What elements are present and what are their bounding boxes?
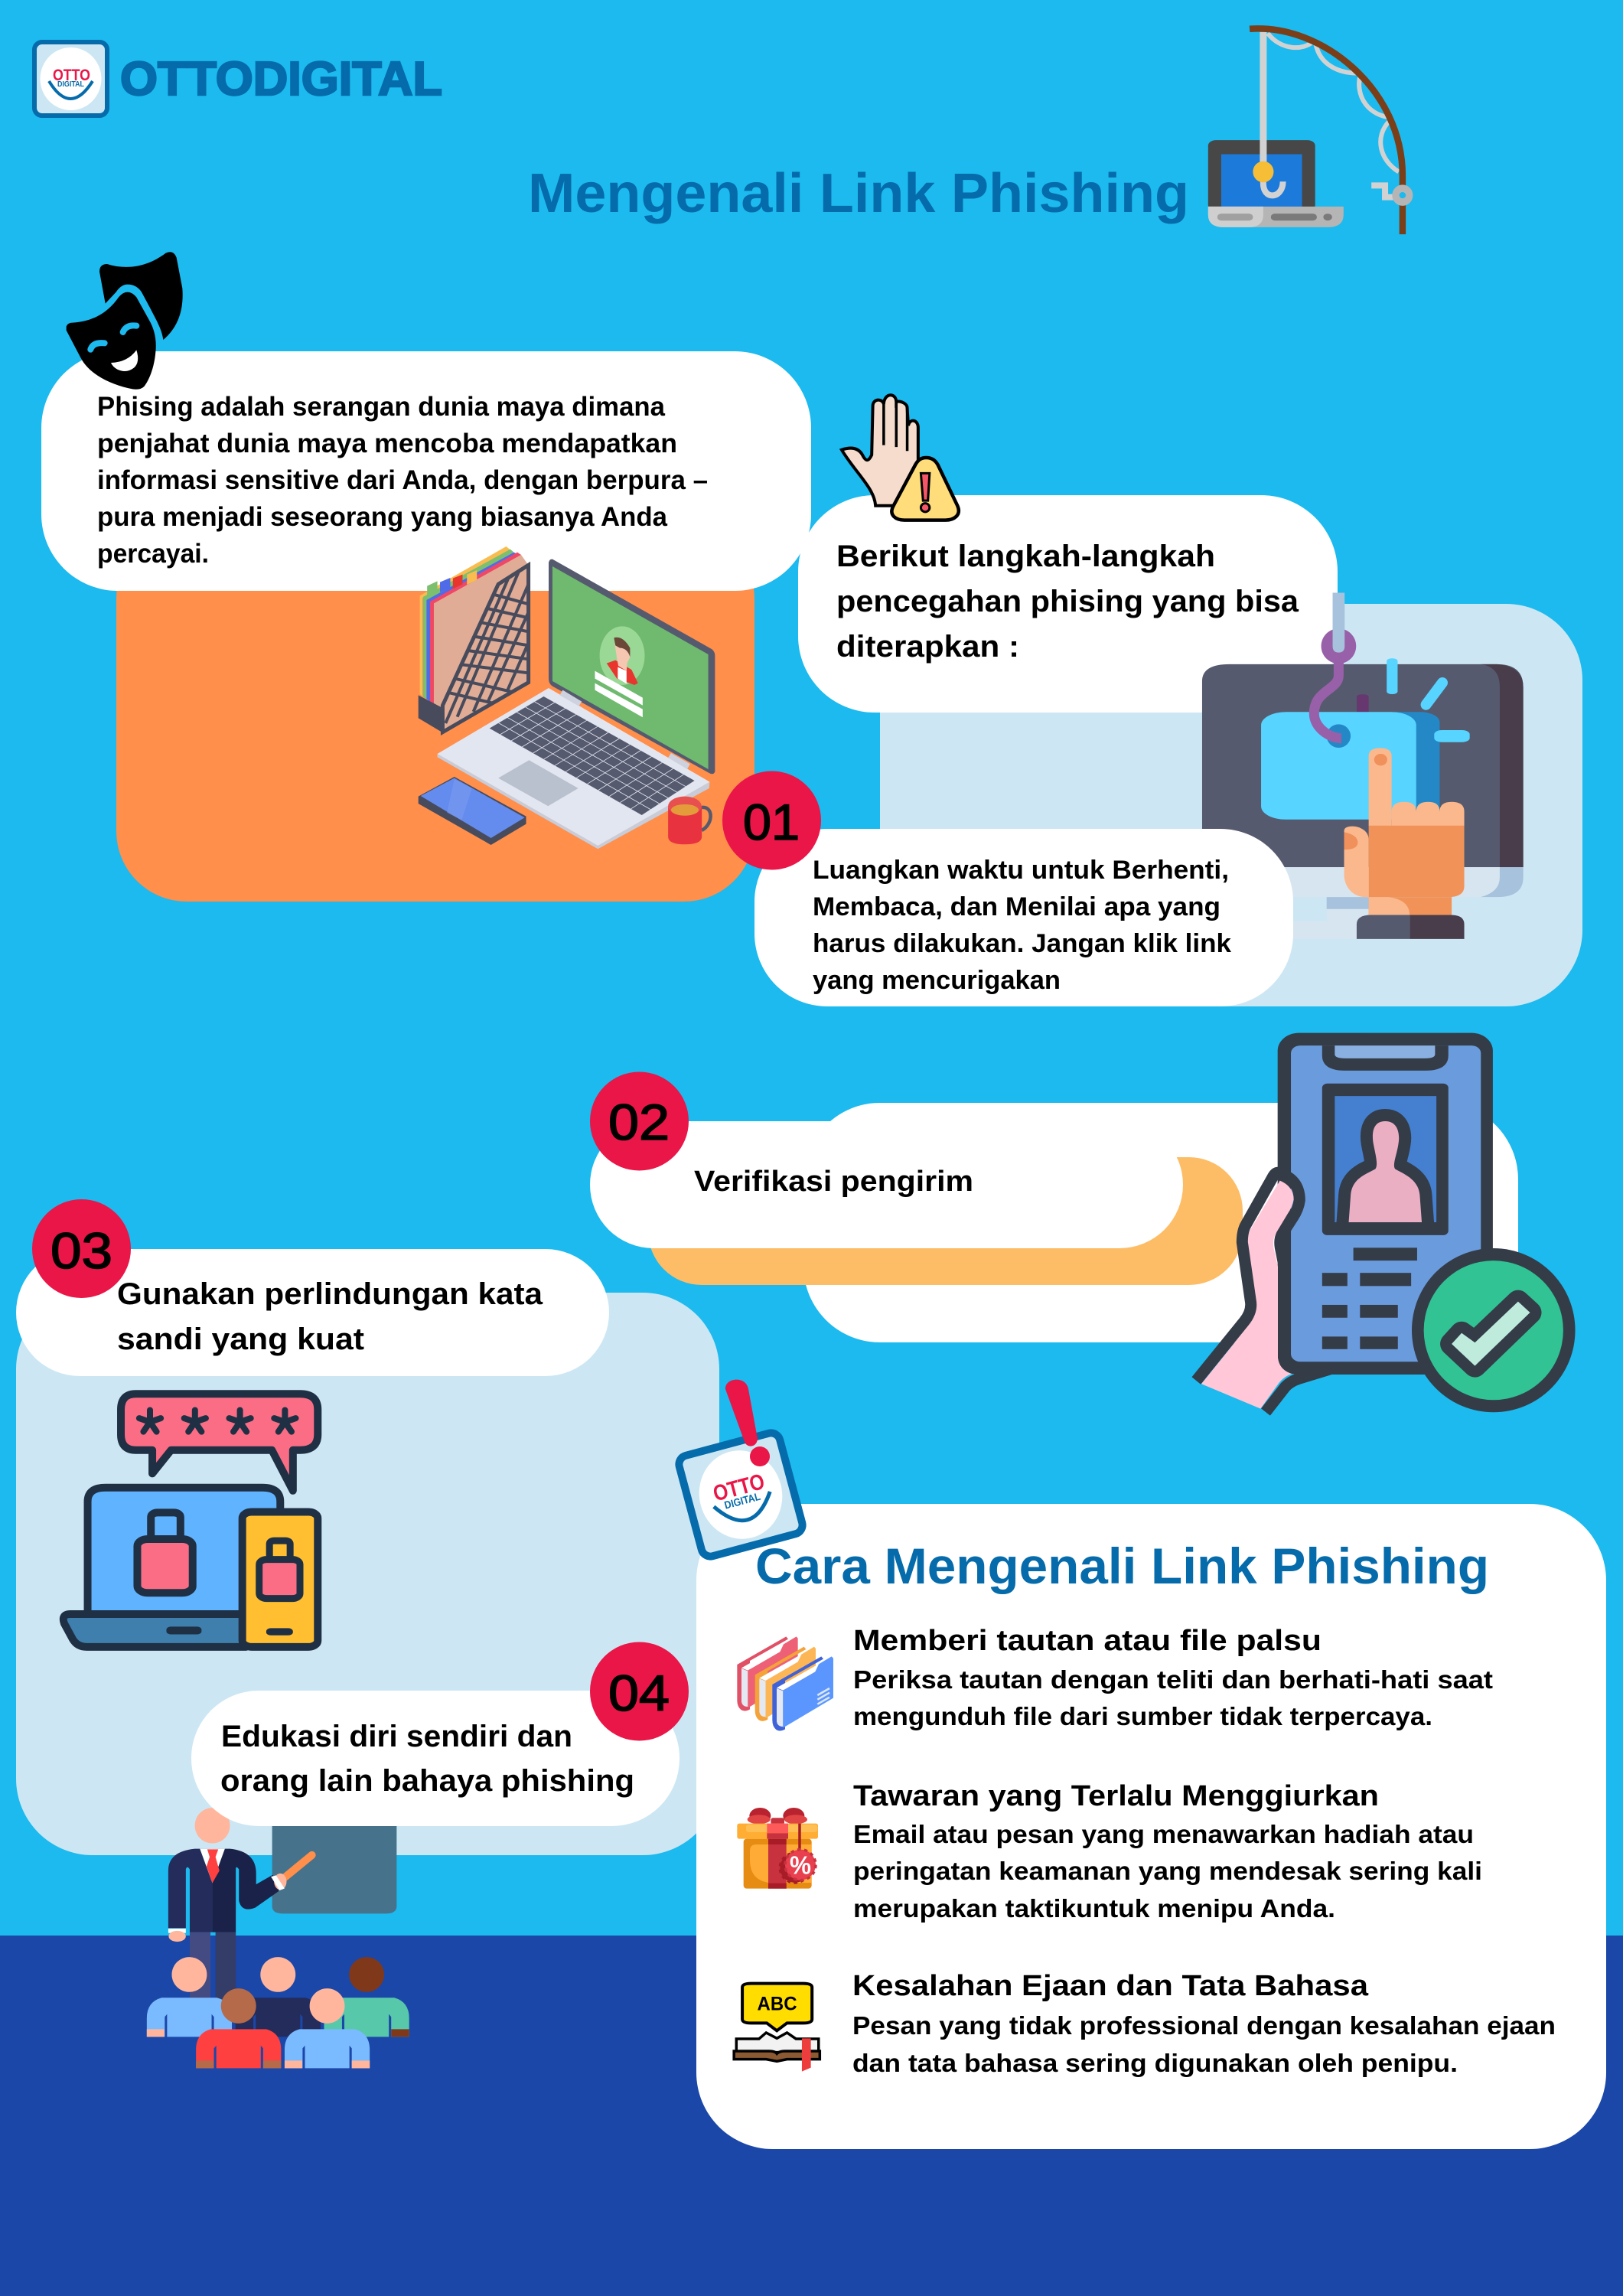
icon: password protected devices xyxy=(64,1394,318,1647)
text: step 03 xyxy=(117,1277,543,1356)
item: tempting offers xyxy=(737,1780,1482,1923)
text: step 01 xyxy=(813,856,1231,995)
icon: book with ABC speech bubble xyxy=(734,1984,820,2072)
logo: tilted Otto Digital tag with exclamation: OTTO xyxy=(711,1469,768,1507)
panel: steps intro bubble xyxy=(798,495,1338,713)
panel: step 03 light background xyxy=(16,1293,719,1855)
icon: gift box with discount tag xyxy=(737,1808,818,1889)
text: intro paragraph: percayai. xyxy=(97,539,209,569)
badge: number 02 xyxy=(590,1071,689,1171)
illustration: teacher with board and audience xyxy=(147,1808,409,2068)
heading: Cara Mengenali Link Phishing: Cara Mengenali Link Phishing xyxy=(755,1538,1489,1594)
badge: number 04 xyxy=(590,1642,689,1740)
text: item heading and description: peringatan keamanan yang mendesak sering kali xyxy=(853,1857,1482,1885)
badge: number 01: 01 xyxy=(743,794,800,850)
panel: step 03 bubble xyxy=(16,1249,609,1376)
title: Mengenali Link Phishing xyxy=(528,163,1189,224)
panel: orange laptop background xyxy=(116,528,754,902)
text: item heading and description xyxy=(853,1780,1482,1923)
text: item heading and description: Periksa tautan dengan teliti dan berhati-hati saat xyxy=(853,1665,1493,1694)
text: item heading and description: dan tata bahasa sering digunakan oleh penipu. xyxy=(852,2049,1458,2077)
text: intro paragraph: informasi sensitive dari Anda, dengan berpura – xyxy=(97,465,708,495)
panel: step 02 yellow layer xyxy=(648,1157,1243,1285)
text: intro paragraph: Phising adalah serangan dunia maya dimana xyxy=(97,392,666,422)
icon: book with ABC speech bubble: ABC xyxy=(758,1994,797,2015)
text: item heading and description xyxy=(853,1625,1493,1730)
text: intro paragraph: pura menjadi seseorang yang biasanya Anda xyxy=(97,502,668,532)
icon: stop hand with warning triangle xyxy=(842,395,959,520)
text: step 04: orang lain bahaya phishing xyxy=(220,1764,634,1798)
text: step 04 xyxy=(220,1720,634,1798)
icon: stacked folders xyxy=(737,1636,833,1731)
text: item heading and description: Memberi tautan atau file palsu xyxy=(853,1625,1322,1657)
icon: gift box with discount tag: % xyxy=(790,1851,811,1880)
panel: step 01 bubble xyxy=(754,829,1293,1006)
panel: step 01 light background xyxy=(880,604,1582,1006)
text: step 03: sandi yang kuat xyxy=(117,1322,364,1356)
badge: number 02: 02 xyxy=(608,1094,670,1150)
badge: number 01 xyxy=(722,771,821,869)
text: item heading and description xyxy=(852,1970,1556,2077)
badge: number 03 xyxy=(32,1199,131,1298)
text: steps intro: diterapkan : xyxy=(836,630,1019,664)
logo: Otto Digital badge: DIGITAL xyxy=(57,80,84,89)
illustration: hand holding phone with verified check xyxy=(1196,1033,1576,1412)
text: step 03: Gunakan perlindungan kata xyxy=(117,1277,543,1311)
icon: theatre masks xyxy=(67,252,183,390)
logo wordmark: OTTODIGITAL xyxy=(120,53,442,106)
text: steps intro: pencegahan phising yang bisa xyxy=(836,585,1299,618)
panel: intro bubble xyxy=(41,351,811,591)
illustration: hook and clicking hand on monitor xyxy=(1202,593,1524,939)
text: item heading and description: merupakan taktikuntuk menipu Anda. xyxy=(853,1894,1335,1923)
badge: number 03: 03 xyxy=(51,1222,112,1279)
badge: number 04: 04 xyxy=(608,1665,670,1721)
panel: how to recognise phishing links xyxy=(696,1504,1606,2149)
text: steps intro: Berikut langkah-langkah xyxy=(836,540,1215,573)
logo: Otto Digital badge: OTTO xyxy=(53,67,90,84)
text: item heading and description: Tawaran yang Terlalu Menggiurkan xyxy=(853,1780,1379,1812)
text: steps intro xyxy=(836,540,1299,664)
text: step 02: Verifikasi pengirim xyxy=(694,1166,973,1198)
logo: tilted Otto Digital tag with exclamation: DIGITAL xyxy=(723,1490,762,1512)
panel: step 02 white back xyxy=(803,1103,1518,1342)
logo: tilted Otto Digital tag with exclamation xyxy=(677,1380,804,1558)
text: item heading and description: mengunduh file dari sumber tidak terpercaya. xyxy=(853,1702,1432,1730)
logo: Otto Digital badge xyxy=(34,42,107,116)
illustration: laptop, folders, phone and mug xyxy=(419,546,715,849)
text: step 04: Edukasi diri sendiri dan xyxy=(221,1720,572,1753)
icon: fishing rod hooking a laptop xyxy=(1208,28,1413,234)
text: intro paragraph: penjahat dunia maya mencoba mendapatkan xyxy=(97,429,677,458)
text: item heading and description: Email atau pesan yang menawarkan hadiah atau xyxy=(853,1820,1474,1848)
text: item heading and description: Kesalahan Ejaan dan Tata Bahasa xyxy=(852,1970,1369,2002)
text: step 01: yang mencurigakan xyxy=(813,966,1061,995)
text: intro paragraph xyxy=(97,392,708,569)
text: step 01: harus dilakukan. Jangan klik link xyxy=(813,929,1231,958)
panel: step 02 bubble xyxy=(590,1121,1183,1248)
text: item heading and description: Pesan yang tidak professional dengan kesalahan ejaan xyxy=(852,2011,1556,2040)
item: spelling and grammar errors xyxy=(734,1970,1556,2077)
text: step 01: Membaca, dan Menilai apa yang xyxy=(813,892,1221,921)
panel: step 04 bubble xyxy=(191,1691,680,1826)
item: fake links or files xyxy=(737,1625,1493,1731)
text: step 01: Luangkan waktu untuk Berhenti, xyxy=(813,856,1229,885)
